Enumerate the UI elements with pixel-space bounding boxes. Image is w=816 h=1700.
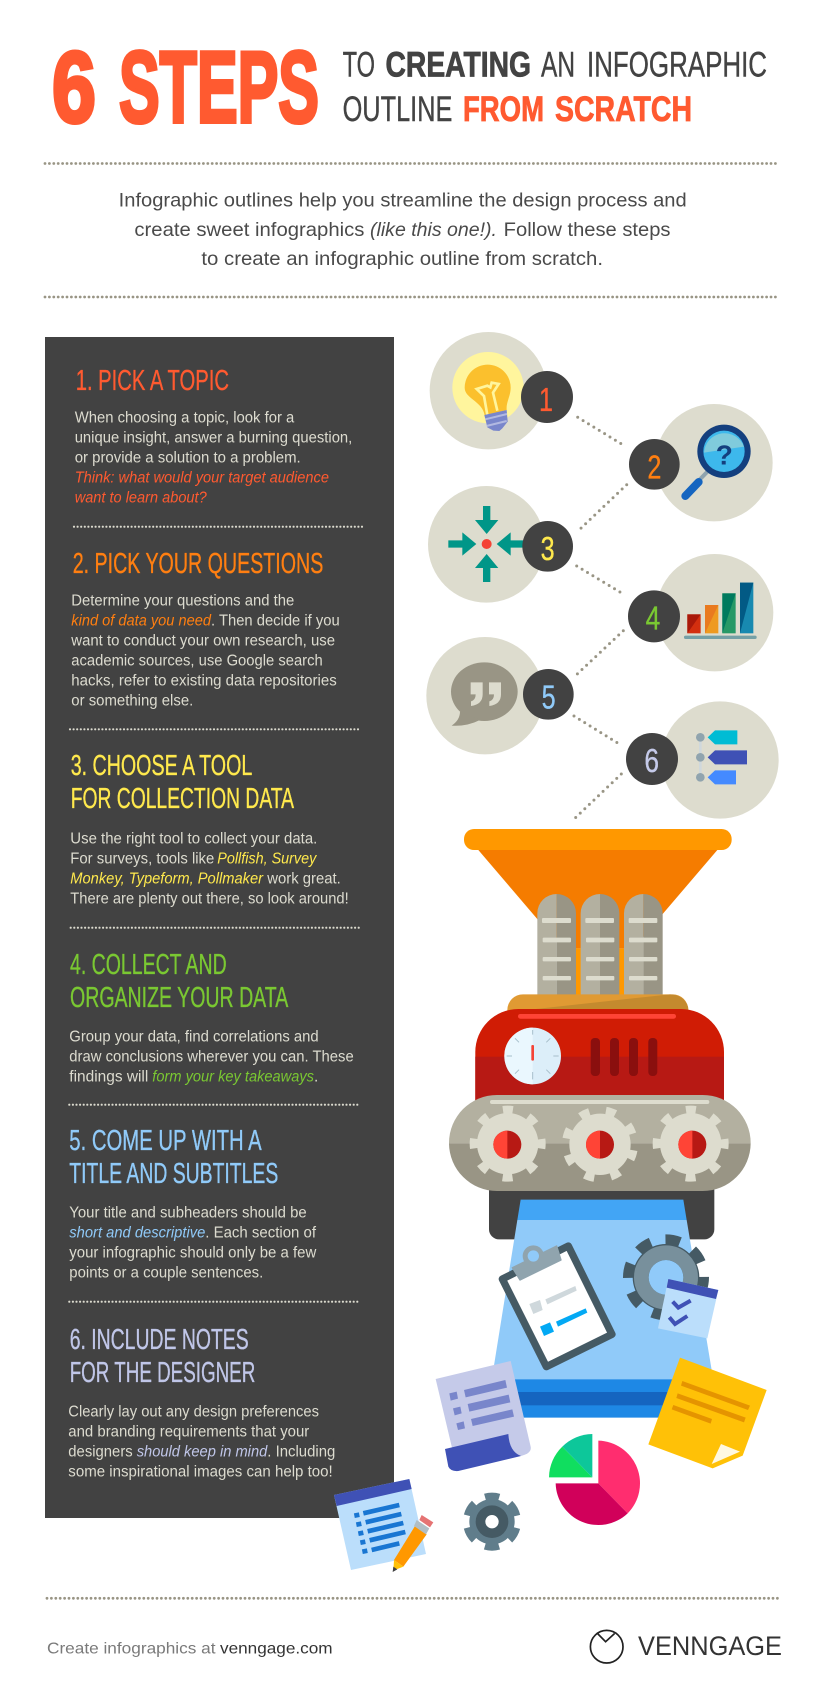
step 2: kind of data you need	[71, 613, 212, 630]
step 5: Your title and subheaders should be	[69, 1204, 307, 1221]
step 3: 3. CHOOSE A TOOL	[71, 750, 252, 782]
step circles 4-6	[426, 554, 779, 819]
tubes	[537, 894, 663, 995]
step 6: 6. INCLUDE NOTES	[70, 1324, 249, 1356]
step 6: FOR THE DESIGNER	[70, 1357, 255, 1389]
step 3: Pollfish, Survey	[217, 850, 317, 867]
step 1: Think: what would your target audience	[75, 469, 329, 486]
badge 1: 1	[539, 382, 553, 419]
badge 2: 2	[647, 450, 661, 487]
intro text	[119, 190, 687, 270]
paper	[486, 1200, 720, 1418]
step 5: . Each section of	[205, 1224, 317, 1241]
step 4: ORGANIZE YOUR DATA	[70, 982, 289, 1014]
step 5: 5. COME UP WITH A	[69, 1125, 262, 1157]
step 4: form your key takeaways	[152, 1069, 314, 1086]
step 6: should keep in mind	[137, 1444, 269, 1461]
panel: steps	[45, 337, 394, 1518]
step 3: For surveys, tools like	[70, 850, 214, 867]
icon: clipboard	[502, 1245, 612, 1367]
title: subtitle: SCRATCH	[555, 90, 692, 129]
title: 6 steps: 6	[52, 32, 96, 144]
intro text: create sweet infographics	[134, 219, 365, 241]
step 2: hacks, refer to existing data repositories	[71, 673, 337, 690]
title: subtitle	[343, 46, 767, 129]
step 2: 2. PICK YOUR QUESTIONS	[73, 548, 323, 580]
step 6	[68, 1324, 335, 1481]
badge 4: 4	[646, 600, 660, 637]
badge 6: 6	[644, 743, 659, 780]
title: subtitle: FROM	[463, 90, 544, 129]
step 6: some inspirational images can help too!	[68, 1464, 333, 1481]
badge 1	[521, 371, 573, 423]
icon: bar chart	[656, 554, 773, 671]
step 3: work great.	[266, 870, 341, 887]
gear 3	[657, 1110, 725, 1178]
step 1: want to learn about?	[75, 489, 207, 506]
badge 5	[523, 669, 574, 720]
step 1: unique insight, answer a burning question,	[75, 429, 352, 446]
lower icons	[334, 1434, 640, 1572]
icon: speech bubble	[426, 637, 544, 754]
funnel	[464, 829, 732, 995]
step 2: academic sources, use Google search	[71, 653, 323, 670]
lid	[507, 994, 688, 1013]
icon: gear with checklist	[624, 1236, 718, 1338]
logo: venngage: VENNGAGE	[638, 1631, 782, 1661]
badge 2	[629, 439, 680, 490]
step 4: draw conclusions wherever you can. These	[69, 1049, 354, 1066]
step 3	[70, 750, 349, 907]
step 4: .	[314, 1069, 318, 1086]
dial	[504, 1028, 561, 1084]
step 4: Group your data, find correlations and	[69, 1029, 319, 1046]
step 2: want to conduct your own research, use	[70, 633, 335, 650]
icon: sticky note	[648, 1358, 767, 1468]
step 2: . Then decide if you	[211, 613, 340, 630]
footer text: venngage.com	[220, 1640, 333, 1657]
title: subtitle: OUTLINE	[343, 90, 452, 129]
step 1: 1. PICK A TOPIC	[76, 365, 229, 397]
gear 2	[557, 1101, 643, 1187]
step 6: designers	[68, 1444, 133, 1461]
gear 1	[474, 1110, 542, 1178]
step 1: or provide a solution to a problem.	[75, 449, 301, 466]
badge 3: 3	[541, 531, 555, 568]
title: 6 steps: STEPS	[119, 32, 319, 144]
step 4: 4. COLLECT AND	[70, 949, 227, 981]
footer text: Create infographics at	[47, 1640, 216, 1657]
step 5: your infographic should only be a few	[69, 1244, 317, 1261]
step 4	[69, 949, 354, 1086]
badge 6	[626, 733, 678, 785]
step circles 1-3	[428, 332, 773, 603]
step 3: FOR COLLECTION DATA	[71, 783, 295, 815]
intro text: (like this one!).	[370, 219, 497, 241]
step 3: Monkey, Typeform, Pollmaker	[70, 870, 264, 887]
red body	[475, 1009, 724, 1103]
intro text: to create an infographic outline from scratch.	[201, 248, 603, 270]
icon: arrows to centre	[428, 486, 545, 603]
step 5: points or a couple sentences.	[69, 1264, 263, 1281]
logo: venngage	[590, 1630, 782, 1663]
conveyor with gears	[449, 1095, 751, 1191]
title: 6 steps	[52, 32, 319, 144]
step 5: short and descriptive	[69, 1224, 206, 1241]
icon: magnifier	[655, 404, 773, 521]
step 4: findings will	[69, 1069, 148, 1086]
icon: magnifier: ?	[716, 439, 733, 470]
title: subtitle: TO	[343, 46, 375, 84]
step 2: or something else.	[71, 693, 193, 710]
badge 4	[628, 590, 680, 642]
step 5	[69, 1125, 317, 1281]
title: subtitle: CREATING	[386, 46, 531, 84]
step 6: Clearly lay out any design preferences	[68, 1404, 319, 1421]
paper output and icons on it	[436, 1200, 767, 1471]
icon: list tags	[661, 701, 779, 819]
title	[52, 32, 767, 144]
icon: gear	[458, 1488, 526, 1556]
intro text: Infographic outlines help you streamline the design process and	[119, 190, 687, 212]
footer text	[47, 1640, 333, 1657]
step 2	[70, 548, 340, 710]
step 3: There are plenty out there, so look around!	[70, 890, 349, 907]
icon: light bulb	[430, 332, 547, 449]
step 2: Determine your questions and the	[71, 593, 294, 610]
intro text: Follow these steps	[504, 219, 671, 241]
icon: notepad and pencil	[334, 1479, 433, 1572]
badge 5: 5	[542, 679, 556, 716]
step 5: TITLE AND SUBTITLES	[69, 1158, 278, 1190]
badge 3	[522, 521, 573, 572]
step 6: . Including	[267, 1444, 335, 1461]
step 1: When choosing a topic, look for a	[75, 409, 295, 426]
step 6: and branding requirements that your	[68, 1424, 309, 1441]
pie chart	[549, 1434, 640, 1525]
step 3: Use the right tool to collect your data.	[70, 830, 317, 847]
icon: document scroll	[436, 1361, 531, 1471]
machine: red body and conveyor	[449, 994, 751, 1239]
step 1	[75, 365, 352, 506]
printer base	[489, 1187, 714, 1239]
title: subtitle: AN	[541, 46, 575, 84]
